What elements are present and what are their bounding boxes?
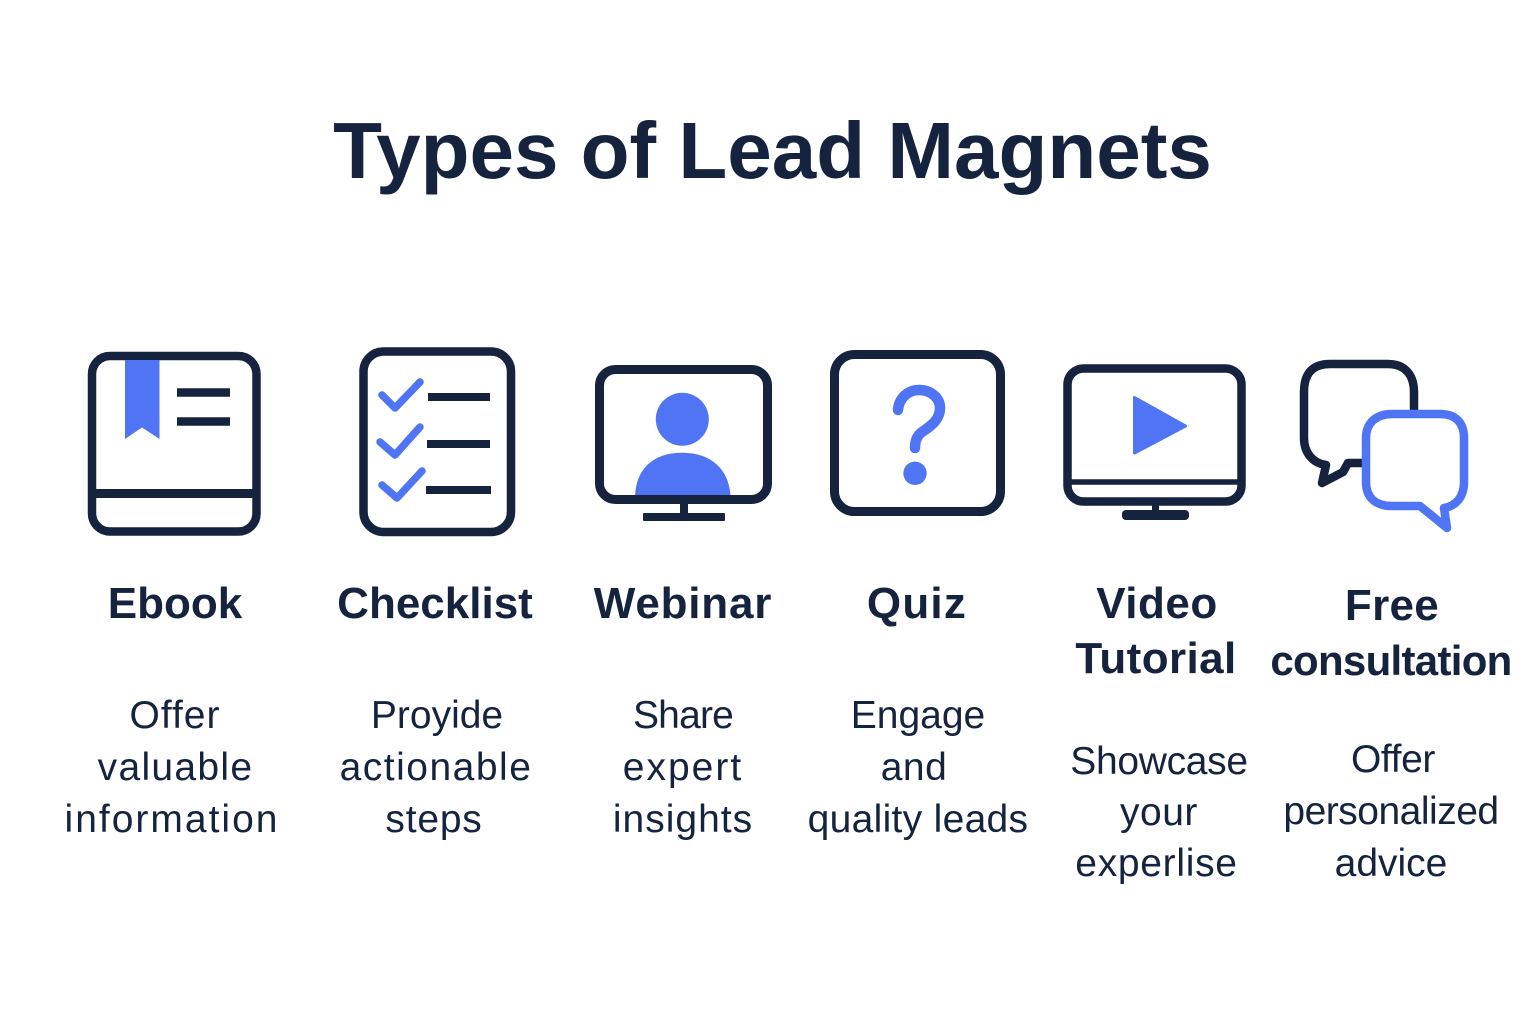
text: quiz description: quality leads bbox=[808, 798, 1028, 840]
text: ebook description: Offer bbox=[130, 694, 220, 736]
text: checklist description: Proyide bbox=[371, 694, 503, 736]
text: webinar description bbox=[613, 694, 753, 840]
heading: free consultation bbox=[1270, 581, 1512, 684]
text: quiz description: Engage bbox=[851, 694, 985, 736]
text: free consultation description: advice bbox=[1335, 842, 1447, 885]
text: checklist description bbox=[340, 694, 532, 840]
text: video tutorial description: experlise bbox=[1075, 842, 1238, 885]
text: quiz description bbox=[808, 694, 1028, 840]
text: webinar description: insights bbox=[613, 798, 753, 840]
heading: video tutorial: Tutorial bbox=[1075, 634, 1237, 683]
text: free consultation description bbox=[1283, 738, 1499, 885]
text: ebook description: valuable bbox=[98, 746, 253, 788]
heading: free consultation: Free bbox=[1345, 581, 1439, 630]
text: checklist description: steps bbox=[385, 798, 483, 840]
heading: ebook: Ebook bbox=[108, 579, 242, 628]
text: checklist description: actionable bbox=[340, 746, 532, 788]
text: video tutorial description bbox=[1070, 740, 1248, 885]
icon: webinar bbox=[595, 365, 772, 521]
text: video tutorial description: Showcase bbox=[1070, 740, 1248, 783]
heading: checklist: Checklist bbox=[337, 579, 533, 628]
text: webinar description: Share bbox=[633, 694, 733, 736]
text: free consultation description: Offer bbox=[1351, 738, 1435, 781]
heading: video tutorial: Video bbox=[1096, 579, 1218, 628]
icon: free consultation bbox=[1300, 360, 1468, 532]
text: ebook description: information bbox=[65, 798, 279, 840]
text: quiz description: and bbox=[881, 746, 947, 788]
text: webinar description: expert bbox=[623, 746, 743, 788]
heading: free consultation: consultation bbox=[1270, 637, 1512, 684]
heading: quiz: Quiz bbox=[867, 579, 967, 628]
icon: checklist bbox=[359, 347, 516, 536]
title: Types of Lead Magnets bbox=[333, 106, 1212, 195]
icon: quiz bbox=[830, 350, 1005, 516]
text: ebook description bbox=[65, 694, 279, 840]
heading: video tutorial bbox=[1075, 579, 1237, 683]
icon: ebook bbox=[88, 352, 261, 536]
icon: video tutorial bbox=[1063, 364, 1246, 520]
text: video tutorial description: your bbox=[1120, 791, 1198, 834]
text: free consultation description: personalized bbox=[1283, 790, 1499, 833]
heading: webinar: Webinar bbox=[594, 579, 772, 628]
